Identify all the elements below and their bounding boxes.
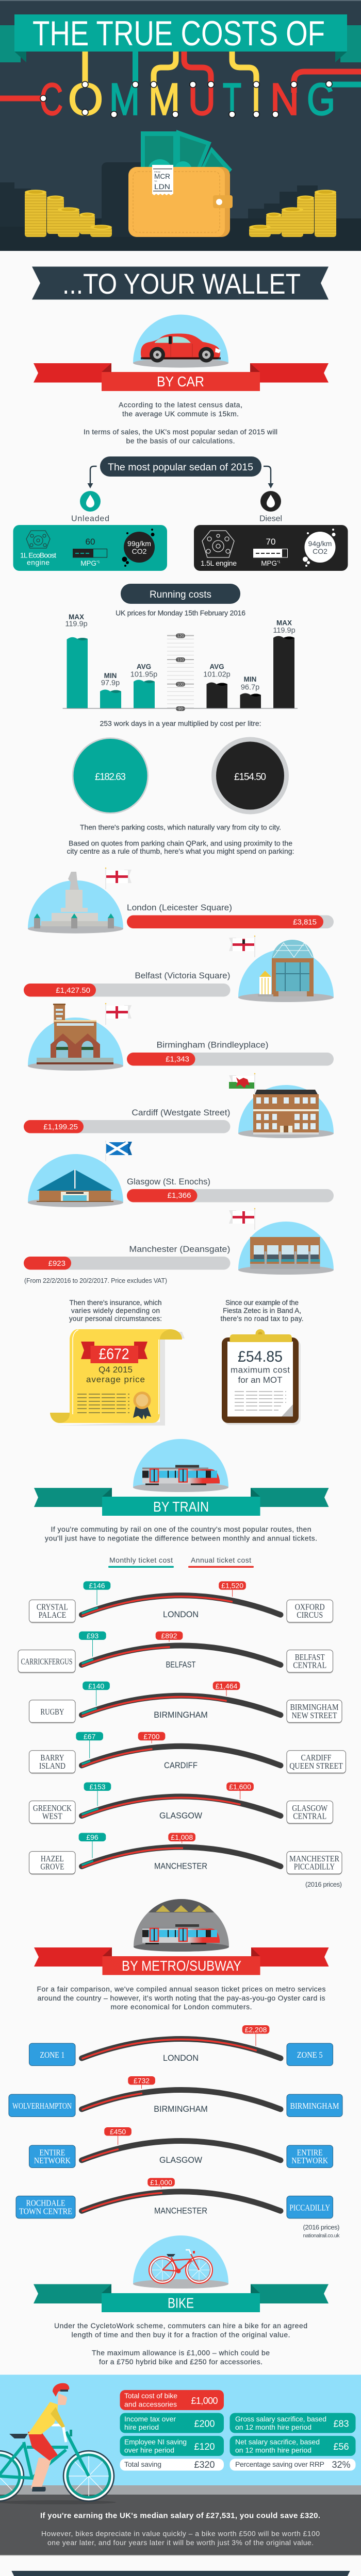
parking: cardiff: [24, 1073, 334, 1138]
bar labels: MIN: [104, 672, 117, 680]
panel: mot clipboard: maximum cost: [231, 1365, 290, 1375]
text: metro intro: around the country – however, it's worth noting that the pay-as-you-go Oyster card is: [37, 1994, 325, 2002]
circle: unleaded annual cost: [72, 737, 149, 814]
text: work days: 253 work days in a year multiplied by cost per litre:: [100, 719, 261, 727]
pill: most popular sedan: The most popular sedan of 2015: [108, 462, 253, 473]
icon: victoria square: [238, 940, 334, 1002]
panel: diesel specs: 1.5L engine: [201, 559, 237, 567]
panel: unleaded specs: *1: [96, 561, 100, 564]
section: bike header: [34, 2235, 329, 2312]
route: glasgow train: GLASGOW: [159, 1810, 202, 1821]
icon: train in tunnel: [134, 1899, 229, 1952]
parking: london: £3,815: [293, 918, 317, 926]
commuting wordmark: I: [251, 74, 261, 125]
flag: northern ireland: [229, 936, 255, 957]
bubble: co2: CO2: [132, 547, 147, 555]
section: by train header: [34, 1439, 329, 1516]
panel: cycle to work savings: [0, 2375, 361, 2555]
panel: diesel specs: MPG: [261, 560, 277, 567]
subway lines: [0, 52, 361, 98]
parking: manchester: [24, 1208, 334, 1275]
text: parking intro: Then there's parking costs, which naturally vary from city to city.: [80, 823, 281, 832]
text: train intro: [45, 1525, 317, 1543]
bar labels: 119.9p: [65, 620, 88, 629]
route: london train: [29, 1581, 333, 1623]
label: diesel: Diesel: [259, 514, 282, 523]
scale: 110: [177, 657, 184, 663]
panel: unleaded specs: [13, 525, 167, 571]
route: cardiff train: ISLAND: [39, 1761, 65, 1771]
table: savings rows: £1,000: [191, 2396, 218, 2406]
scale: 100: [177, 682, 184, 687]
route: birmingham metro: WOLVERHAMPTON: [12, 2101, 72, 2111]
receipt: MCR: [154, 172, 170, 180]
route: birmingham train: NEW STREET: [292, 1710, 337, 1720]
text: cycle to work: The maximum allowance is £1,000 – which could be: [92, 2348, 270, 2357]
table: savings rows: £320: [194, 2460, 215, 2470]
route: birmingham metro: [9, 2076, 342, 2116]
panel: unleaded specs: 1L EcoBoost: [20, 551, 56, 560]
gauge: [253, 549, 288, 557]
parking: belfast: [24, 936, 334, 1002]
text: median salary: If you're earning the UK's median salary of £27,531, you could save £320.: [40, 2511, 320, 2520]
commuting wordmark: C: [40, 74, 63, 125]
route: glasgow train: GREENOCK: [33, 1803, 72, 1813]
route: manchester train: HAZEL: [41, 1854, 64, 1863]
bubble: co2: 99g/km: [127, 539, 151, 548]
parking: belfast: £1,427.50: [56, 986, 90, 995]
ribbon: price: [81, 1342, 147, 1363]
icon: diesel drop: [260, 491, 281, 512]
table: savings rows: £200: [194, 2418, 215, 2429]
text: cycle to work: Under the CycletoWork scheme, commuters can hire a bike for an agreed: [54, 2321, 307, 2330]
route: london metro: £2,208: [245, 2026, 267, 2034]
route: birmingham train: BIRMINGHAM: [154, 1710, 208, 1720]
section: by metro header: BY METRO/SUBWAY: [122, 1958, 241, 1974]
panel: diesel specs: 70: [266, 537, 275, 547]
route: glasgow train: CENTRAL: [293, 1811, 326, 1821]
text: parking note: (From 22/2/2016 to 20/2/2017. Price excludes VAT): [24, 1277, 167, 1284]
route: belfast train: BELFAST: [166, 1660, 196, 1669]
text: cycle to work: length of time and then buy it for a fraction of the original value.: [71, 2331, 290, 2339]
commuting wordmark: O: [68, 74, 103, 125]
route: manchester train: £1,008: [171, 1833, 193, 1841]
table: savings rows: hire period: [124, 2423, 159, 2431]
pill: running costs: [121, 584, 240, 604]
panel: mot clipboard: [222, 1329, 301, 1425]
icon: bike in dome: [133, 2235, 228, 2289]
route: manchester metro: PICCADILLY: [289, 2202, 330, 2212]
route: manchester train: PICCADILLY: [294, 1862, 335, 1872]
table: savings rows: £120: [194, 2442, 215, 2452]
parking: glasgow: [28, 1141, 334, 1207]
parking: belfast: Belfast (Victoria Square): [135, 971, 230, 980]
route: cardiff train: QUEEN STREET: [289, 1761, 343, 1771]
panel: unleaded specs: engine: [27, 558, 50, 567]
panel: diesel specs: *1: [277, 561, 281, 564]
route: birmingham train: BIRMINGHAM: [290, 1702, 338, 1712]
icon: rosette: [133, 1392, 151, 1419]
receipt: TO: [154, 180, 157, 182]
bars unleaded: [67, 637, 155, 708]
panel: unleaded specs: 60: [86, 537, 95, 547]
text: road tax: [221, 1299, 303, 1323]
bar labels: 119.9p: [273, 626, 296, 635]
station dots: [40, 81, 332, 117]
route: london train: OXFORD: [295, 1602, 325, 1612]
bar labels: AVG: [209, 663, 224, 671]
text: road tax: Fiesta Zetec is in Band A,: [223, 1307, 301, 1315]
legend: ticket costs: Monthly ticket cost: [109, 1556, 173, 1564]
route: birmingham train: RUGBY: [40, 1707, 64, 1717]
route: glasgow metro: ENTIRE: [39, 2147, 65, 2157]
flag: scotland: [106, 1141, 132, 1161]
route: belfast train: CARRICKFERGUS: [21, 1657, 72, 1666]
circle: unleaded annual cost: £182.63: [95, 772, 126, 783]
flag: england: [105, 1003, 132, 1025]
route: belfast train: £892: [161, 1632, 177, 1640]
text: metro intro: more economical for London commuters.: [110, 2003, 252, 2011]
coins right: [249, 190, 336, 237]
text: cycle to work: [54, 2321, 307, 2366]
text: insurance: [69, 1299, 162, 1323]
route: birmingham train: £1,464: [216, 1682, 238, 1690]
text: train intro: If you're commuting by rail on one of the country's most popular routes, then: [51, 1525, 311, 1533]
text: census intro: In terms of sales, the UK's most popular sedan of 2015 will: [84, 428, 277, 436]
text: metro intro: [37, 1985, 326, 2011]
panel: diesel specs: [194, 525, 348, 571]
text: road tax: Since our example of the: [225, 1299, 299, 1307]
text: metro prices note: nationalrail.co.uk: [303, 2233, 340, 2239]
route: glasgow train: WEST: [42, 1811, 62, 1821]
pill: most popular sedan: [100, 456, 261, 477]
icon: westgate street: [238, 1085, 334, 1138]
table: savings rows: on 12 month hire period: [235, 2446, 311, 2454]
route: manchester metro: TOWN CENTRE: [19, 2206, 72, 2216]
section: by train header: BY TRAIN: [153, 1499, 209, 1515]
table: savings rows: Net salary sacrifice, based: [235, 2438, 320, 2446]
coins left: [25, 190, 112, 237]
route: glasgow metro: NETWORK: [34, 2156, 71, 2165]
text: median salary: [40, 2511, 320, 2547]
route: manchester train: £96: [86, 1833, 99, 1841]
ribbon: price: £672: [99, 1346, 129, 1363]
route: belfast train: [18, 1631, 333, 1673]
parking: glasgow: Glasgow (St. Enochs): [127, 1177, 210, 1187]
text: parking intro: [67, 823, 294, 855]
route: london train: LONDON: [163, 1609, 199, 1619]
scale: 120: [177, 634, 184, 638]
table: savings rows: Income tax over: [124, 2415, 176, 2423]
commuting wordmark: U: [188, 74, 216, 125]
route: cardiff train: [29, 1732, 346, 1774]
table: savings rows: [120, 2390, 356, 2471]
flag: england: [229, 1208, 255, 1230]
text: cycle to work: for a £750 hybrid bike and £250 for accessories.: [99, 2358, 262, 2366]
route: glasgow metro: NETWORK: [291, 2156, 329, 2165]
icon: st enochs: [28, 1154, 123, 1207]
commuting wordmark: N: [270, 74, 299, 125]
route: glasgow train: GLASGOW: [292, 1803, 328, 1813]
route: manchester metro: £1,000: [150, 2178, 172, 2187]
table: savings rows: over hire period: [124, 2446, 174, 2454]
text: census intro: According to the latest census data,: [119, 401, 242, 409]
bars diesel: [206, 636, 294, 708]
bar labels: 96.7p: [241, 683, 259, 691]
route: birmingham metro: BIRMINGHAM: [154, 2104, 208, 2114]
scale: [167, 634, 194, 711]
text: census intro: [84, 401, 277, 445]
parking: manchester: £923: [48, 1259, 65, 1268]
bar labels: 97.9p: [101, 679, 120, 687]
text: 2016 prices train: (2016 prices): [305, 1880, 342, 1888]
table: savings rows: £56: [333, 2442, 349, 2452]
parking: london: London (Leicester Square): [127, 903, 232, 912]
icon: brindleyplace: [28, 1004, 123, 1071]
circle: diesel annual cost: £154.50: [234, 772, 266, 783]
panel: unleaded specs: MPG: [80, 560, 96, 567]
parking: cardiff: Cardiff (Westgate Street): [132, 1108, 230, 1117]
route: glasgow metro: [29, 2127, 333, 2168]
route: london train: PALACE: [39, 1610, 66, 1620]
text: insurance: your personal circumstances:: [69, 1315, 162, 1323]
table: savings rows: Percentage saving over RRP: [235, 2460, 324, 2468]
table: savings rows: Gross salary sacrifice, based: [235, 2415, 326, 2423]
text: parking intro: Based on quotes from parking chain QPark, and using proximity to the: [69, 839, 292, 847]
route: birmingham train: £140: [88, 1682, 104, 1690]
arrow: to diesel: [264, 466, 273, 488]
route: birmingham metro: £732: [134, 2076, 150, 2084]
table: savings rows: on 12 month hire period: [235, 2423, 311, 2431]
parking: birmingham: [28, 1003, 334, 1071]
route: cardiff train: £67: [84, 1732, 96, 1740]
parking: birmingham: Birmingham (Brindleyplace): [157, 1040, 268, 1050]
text: train intro: you'll just have to negotiate the difference between monthly and annual tickets.: [45, 1534, 317, 1543]
text: metro prices note: (2016 prices): [303, 2224, 339, 2231]
pill: running costs: Running costs: [150, 589, 211, 600]
bar labels: 101.95p: [130, 671, 157, 679]
parking: london: [28, 868, 334, 934]
text: census intro: the average UK commute is 15km.: [122, 410, 239, 418]
route: manchester train: [29, 1833, 342, 1875]
route: london train: CIRCUS: [297, 1610, 323, 1620]
panel: insurance scroll: average price: [86, 1375, 145, 1384]
bar labels: AVG: [137, 663, 151, 671]
text: insurance: varies widely depending on: [71, 1307, 160, 1315]
text: insurance: Then there's insurance, which: [69, 1299, 162, 1307]
route: london metro: [29, 2025, 333, 2066]
route: cardiff train: BARRY: [40, 1753, 64, 1762]
route: glasgow train: £153: [89, 1783, 106, 1791]
route: birmingham train: [29, 1682, 342, 1723]
bubble: co2: [303, 529, 335, 567]
panel: mot clipboard: £54.85: [238, 1348, 283, 1365]
text: census intro: be the basis of our calculations.: [126, 437, 235, 445]
bar labels: [65, 613, 296, 691]
text: parking intro: city centre as a rule of thumb, here's what you might spend on parking:: [67, 847, 294, 855]
receipt: LDN: [154, 182, 170, 191]
commuting wordmark: G: [307, 74, 335, 125]
text: median salary: one year later, and four years later it will be worth just 3% of the original value.: [47, 2538, 314, 2547]
circle: diesel annual cost: [211, 737, 289, 814]
route: london train: CRYSTAL: [37, 1602, 68, 1612]
text: uk prices date: UK prices for Monday 15th February 2016: [116, 609, 245, 617]
route: manchester train: MANCHESTER: [154, 1861, 207, 1871]
route: cardiff train: £700: [143, 1732, 160, 1740]
heading banner: to your wallet: ...TO YOUR WALLET: [62, 267, 301, 300]
legend: ticket costs: [108, 1556, 254, 1568]
route: manchester metro: ROCHDALE: [26, 2198, 65, 2208]
section: by car header: [34, 315, 329, 391]
receipt: FROM: [154, 171, 160, 173]
icon: deansgate: [238, 1222, 334, 1275]
arrow: to unleaded: [88, 466, 97, 488]
icon: car in dome: [133, 315, 228, 368]
route: london metro: ZONE 1: [40, 2050, 64, 2060]
bar chart: fuel prices: [63, 613, 298, 711]
label: unleaded: Unleaded: [71, 514, 109, 523]
section: by car header: BY CAR: [157, 374, 204, 389]
bar labels: 101.02p: [203, 671, 231, 679]
route: manchester train: GROVE: [40, 1862, 64, 1872]
icon: train in dome: [133, 1439, 228, 1492]
bar labels: MAX: [276, 619, 292, 626]
text: road tax: there's no road tax to pay.: [221, 1315, 303, 1323]
illustration: cyclist: [0, 2383, 114, 2501]
bubble: co2: CO2: [313, 547, 327, 555]
commuting wordmark: M: [109, 74, 140, 125]
scale: 90: [178, 707, 183, 711]
icon: unleaded drop: [80, 491, 101, 512]
commuting wordmark: [40, 74, 335, 125]
icon: engine: [202, 531, 234, 557]
route: glasgow metro: ENTIRE: [297, 2147, 323, 2157]
route: belfast train: BELFAST: [295, 1652, 325, 1662]
route: london metro: ZONE 5: [297, 2050, 323, 2060]
panel: insurance scroll: [50, 1329, 185, 1426]
parking: birmingham: £1,343: [166, 1055, 189, 1064]
route: birmingham metro: BIRMINGHAM: [290, 2101, 339, 2111]
route: london train: £1,520: [221, 1582, 243, 1590]
route: glasgow metro: £450: [110, 2128, 126, 2136]
bar labels: MAX: [69, 613, 84, 621]
route: glasgow metro: GLASGOW: [159, 2155, 202, 2165]
route: manchester train: MANCHESTER: [289, 1854, 340, 1863]
icon: wallet with banknotes and receipt: [128, 130, 233, 237]
icon: leicester square: [28, 872, 123, 934]
commuting wordmark: T: [223, 74, 241, 125]
icon: engine: [26, 531, 50, 548]
table: savings rows: and accessories: [124, 2400, 177, 2408]
route: london train: £146: [89, 1582, 105, 1590]
legend: ticket costs: Annual ticket cost: [191, 1556, 251, 1564]
section: bike header: BIKE: [168, 2295, 194, 2311]
route: manchester metro: [16, 2178, 333, 2218]
panel: mot clipboard: for an MOT: [238, 1375, 283, 1385]
section: by metro header: [34, 1899, 329, 1975]
gauge: [73, 549, 107, 557]
table: savings rows: Total cost of bike: [124, 2392, 177, 2400]
route: cardiff train: CARDIFF: [301, 1753, 331, 1762]
parking: glasgow: £1,366: [168, 1191, 191, 1200]
text: median salary: However, bikes depreciate in value quickly – a bike worth £500 will be worth £100: [41, 2530, 320, 2538]
flag: wales: [229, 1073, 255, 1095]
flag: england: [105, 868, 132, 889]
bar labels: MIN: [244, 675, 256, 683]
table: savings rows: 32%: [332, 2460, 351, 2470]
header panel: [0, 0, 361, 251]
bubble: co2: [122, 529, 155, 567]
parking: manchester: Manchester (Deansgate): [129, 1244, 230, 1254]
bubble: co2: 94g/km: [308, 539, 332, 548]
route: belfast train: £93: [87, 1632, 99, 1640]
route: london metro: LONDON: [163, 2053, 199, 2063]
text: metro prices note: [303, 2224, 340, 2239]
route: manchester metro: MANCHESTER: [154, 2206, 207, 2215]
receipt: [152, 165, 173, 195]
parking: cardiff: £1,199.25: [43, 1123, 78, 1131]
table: savings rows: Employee NI saving: [124, 2438, 187, 2446]
table: savings rows: Total saving: [124, 2460, 161, 2468]
commuting wordmark: M: [149, 74, 180, 125]
table: savings rows: £83: [333, 2418, 349, 2429]
panel: insurance scroll: Q4 2015: [99, 1365, 133, 1375]
route: glasgow train: [29, 1783, 333, 1824]
text: metro intro: For a fair comparison, we've compiled annual season ticket prices on metro services: [37, 1985, 326, 1993]
route: glasgow train: £1,600: [229, 1783, 251, 1791]
route: belfast train: CENTRAL: [293, 1660, 326, 1670]
route: cardiff train: CARDIFF: [164, 1760, 198, 1770]
